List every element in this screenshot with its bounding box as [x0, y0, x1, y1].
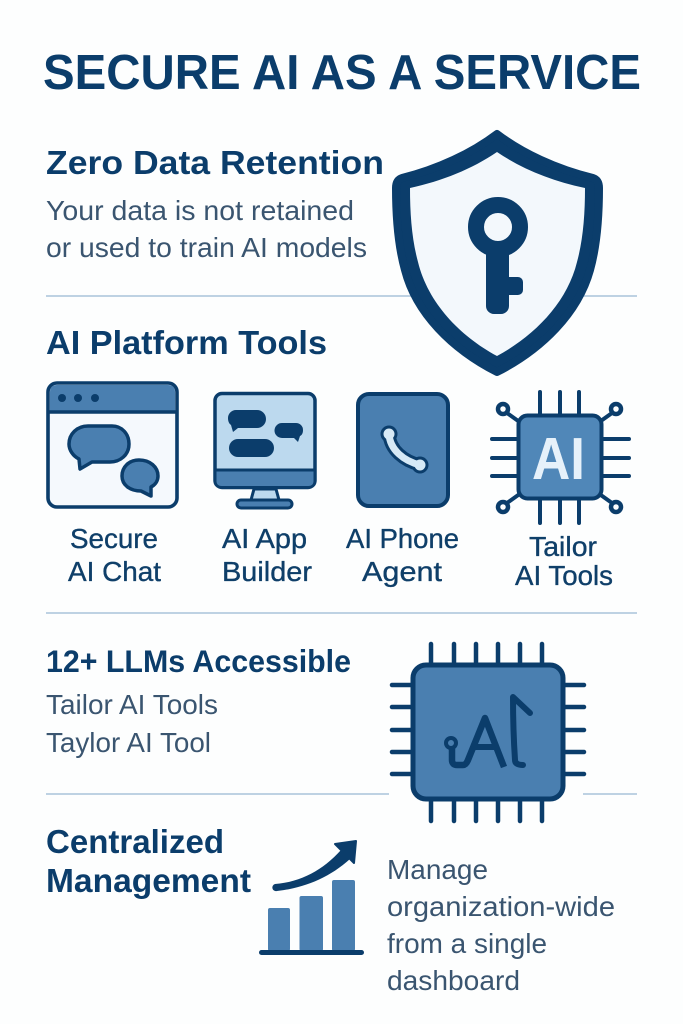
icon: app builder monitor	[215, 394, 315, 508]
text block: LLM tools	[46, 689, 218, 758]
icon: secure chat browser window	[48, 383, 177, 507]
labels: secure AI chat	[68, 523, 161, 587]
title: SECURE AI AS A SERVICE	[43, 46, 641, 100]
text block: manage organization-wide: Manage	[387, 854, 488, 885]
panel: zero data retention	[46, 145, 384, 263]
labels: AI app builder	[222, 523, 312, 587]
text block: LLM tools: Tailor AI Tools	[46, 689, 218, 720]
labels: AI app builder: Builder	[222, 556, 312, 587]
heading: centralized management: Management	[46, 862, 251, 899]
text block: retention description: Your data is not retained	[46, 195, 354, 226]
icon: rising bar chart with arrow	[259, 841, 364, 955]
heading: 12+ LLMs accessible: 12+ LLMs Accessible	[46, 643, 351, 679]
labels: tailor AI tools: AI Tools	[515, 560, 613, 591]
labels: AI phone agent: AI Phone	[346, 523, 459, 554]
heading: centralized management: Centralized	[46, 823, 224, 860]
text block: LLM tools: Taylor AI Tool	[46, 727, 211, 758]
labels: secure AI chat: Secure	[70, 523, 158, 554]
text block: manage organization-wide: organization-wide	[387, 891, 615, 922]
text block: retention description: or used to train AI models	[46, 232, 367, 263]
heading: zero data retention: Zero Data Retention	[46, 145, 384, 182]
labels: AI app builder: AI App	[222, 523, 307, 554]
text block: manage organization-wide: from a single	[387, 928, 547, 959]
labels: AI phone agent: Agent	[362, 556, 442, 587]
text block: manage organization-wide	[387, 854, 615, 996]
labels: AI phone agent	[346, 523, 459, 587]
labels: tailor AI tools	[515, 531, 613, 591]
labels: tailor AI tools: Tailor	[529, 531, 597, 562]
heading: AI platform tools: AI Platform Tools	[46, 325, 327, 362]
text block: manage organization-wide: dashboard	[387, 965, 520, 996]
icon: shield with key	[396, 134, 599, 372]
icon: large AI chip	[392, 644, 584, 821]
icon: phone agent	[358, 394, 448, 506]
icon: AI chip with circuit nodes	[492, 392, 629, 523]
labels: secure AI chat: AI Chat	[68, 556, 161, 587]
text block: retention description	[46, 195, 367, 263]
icon: AI chip with circuit nodes: AI	[532, 426, 585, 492]
heading: centralized management	[46, 823, 251, 899]
